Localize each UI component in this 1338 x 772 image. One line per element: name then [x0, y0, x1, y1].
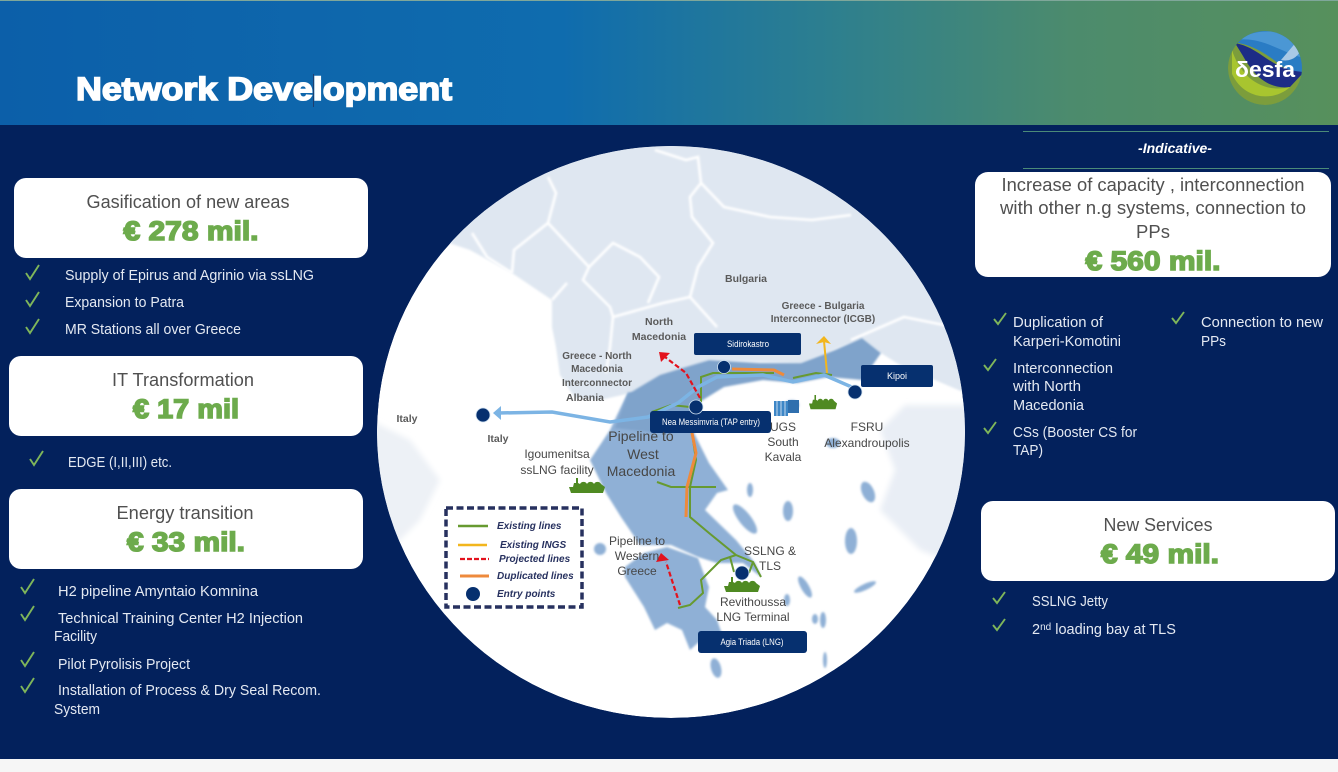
Peloponnese: [625, 547, 723, 650]
duplicated lines: [732, 369, 784, 375]
list: capacity items: Interconnection: [1013, 361, 1113, 377]
map legend: Entry points: [497, 589, 556, 600]
label: Nea Messimvria: Nea Messimvria (TAP entry): [662, 417, 760, 427]
list: gasification items: Expansion to Patra: [65, 295, 185, 311]
map labels: countries and interconnectors: North: [645, 316, 673, 328]
land: Balkans: [440, 140, 970, 400]
label: Sidirokastro: [694, 333, 801, 355]
panel: IT transformation: € 17 mil: [133, 394, 239, 424]
label: Kipoi: [861, 365, 933, 387]
TAP line to Italy: [498, 375, 854, 422]
map labels: countries and interconnectors: Greece - North: [562, 351, 632, 362]
panel: increase of capacity: PPs: [1136, 221, 1170, 242]
map labels: countries and interconnectors: Bulgaria: [725, 273, 767, 285]
map labels: countries and interconnectors: Macedonia: [571, 364, 623, 375]
panel: gasification of new areas: € 278 mil.: [124, 216, 258, 246]
map legend: Existing INGS: [500, 540, 566, 551]
list: capacity items: PPs: [1201, 334, 1226, 350]
panel: new services: € 49 mil.: [1101, 539, 1219, 569]
list: energy items: Pilot Pyrolisis Project: [58, 657, 190, 673]
list: capacity items: TAP): [1013, 443, 1043, 459]
map labels: facilities: Macedonia: [607, 463, 675, 479]
panel: gasification of new areas: Gasification of new areas: [86, 191, 290, 212]
indicative note: [1023, 132, 1329, 168]
map labels: facilities: UGS: [770, 420, 796, 434]
map legend: [446, 508, 582, 607]
list: energy items: Installation of Process & Dry Seal Recom.: [58, 683, 321, 699]
map labels: countries and interconnectors: Greece - Bulgaria: [782, 301, 865, 312]
list: capacity items: Duplication of: [1013, 315, 1104, 331]
icon: UGS tanks: [774, 400, 799, 416]
list: new services items: loading bay at TLS: [1051, 622, 1176, 638]
list: energy items: [21, 579, 321, 718]
map labels: countries and interconnectors: Italy: [487, 433, 509, 445]
map labels: facilities: ssLNG facility: [520, 463, 594, 477]
map legend: Duplicated lines: [497, 571, 574, 582]
land: Turkey: [880, 402, 965, 560]
arrow: ICGB connector: [816, 336, 831, 373]
label: Agia Triada: [698, 631, 807, 653]
borders: [472, 150, 954, 373]
list: gasification items: [26, 265, 314, 338]
map labels: countries and interconnectors: Italy: [396, 413, 418, 425]
logo: desfa: [1228, 31, 1302, 105]
list: capacity items: with North: [1012, 379, 1081, 395]
map circle: [370, 140, 970, 718]
indicative note: -Indicative-: [1138, 140, 1212, 156]
map legend: Existing lines: [497, 521, 562, 532]
existing lines: [652, 373, 832, 608]
list: capacity items: [984, 312, 1324, 459]
header band: [0, 0, 1338, 125]
panel: increase of capacity: with other n.g systems, connection to: [999, 197, 1306, 218]
map labels: countries and interconnectors: Interconnector (ICGB): [771, 314, 875, 325]
footer strip: [0, 759, 1338, 772]
icon: LNG ship Igoumenitsa: [569, 478, 605, 493]
icon: LNG ship FSRU: [809, 395, 837, 409]
map labels: facilities: West: [627, 446, 659, 462]
list: new services items: 2: [1032, 622, 1040, 638]
list: energy items: System: [54, 702, 100, 718]
panel: increase of capacity: € 560 mil.: [1086, 246, 1220, 276]
panel: IT transformation: [9, 356, 363, 436]
logo: desfa: δesfa: [1235, 57, 1296, 82]
label: Nea Messimvria: [650, 411, 771, 433]
list: energy items: Technical Training Center H2 Injection: [58, 611, 303, 627]
panel: new services: New Services: [1104, 514, 1212, 535]
panel: energy transition: Energy transition: [116, 502, 254, 523]
list: new services items: SSLNG Jetty: [1032, 594, 1109, 610]
label: Sidirokastro: Sidirokastro: [727, 339, 769, 349]
label: Kipoi: Kipoi: [887, 371, 907, 381]
map labels: countries and interconnectors: Macedonia: [632, 331, 686, 343]
list: IT items: [30, 451, 172, 471]
panel: gasification of new areas: [14, 178, 368, 258]
map labels: facilities: Alexandroupolis: [824, 436, 910, 450]
label: Agia Triada: Agia Triada (LNG): [720, 637, 784, 647]
islands: [594, 400, 878, 679]
panel: energy transition: [9, 489, 363, 569]
arrowhead: TAP: [493, 406, 501, 420]
map labels: countries and interconnectors: Interconnector: [562, 378, 632, 389]
map legend: Projected lines: [499, 554, 571, 565]
map labels: facilities: TLS: [759, 559, 781, 573]
list: capacity items: Macedonia: [1013, 398, 1085, 414]
map labels: facilities: Revithoussa: [720, 595, 786, 609]
list: energy items: H2 pipeline Amyntaio Komnina: [58, 584, 259, 600]
map labels: facilities: [520, 420, 910, 624]
panel: increase of capacity: Increase of capacity , interconnection: [1002, 174, 1304, 195]
list: new services items: nd: [1040, 622, 1051, 633]
map labels: facilities: Western: [615, 549, 659, 563]
map labels: facilities: LNG Terminal: [716, 610, 790, 624]
land: Italy: [377, 420, 439, 544]
title: Network Development: [76, 71, 452, 107]
icon: LNG ship Revithoussa: [724, 577, 760, 592]
arrow: projected line to North Macedonia: [659, 352, 700, 398]
list: gasification items: MR Stations all over Greece: [65, 322, 241, 338]
arrow: projected line to Western Greece: [656, 553, 680, 605]
list: IT items: EDGE (I,II,III) etc.: [68, 455, 172, 471]
map pipelines: [493, 369, 854, 608]
panel: increase of capacity: [975, 172, 1331, 277]
map labels: facilities: FSRU: [851, 420, 883, 434]
map labels: facilities: Pipeline to: [608, 428, 674, 444]
list: capacity items: CSs (Booster CS for: [1013, 425, 1137, 441]
map labels: facilities: Kavala: [765, 450, 802, 464]
map labels: facilities: South: [767, 435, 799, 449]
panel: new services: [981, 501, 1335, 581]
panel: IT transformation: IT Transformation: [112, 369, 254, 390]
panel: energy transition: € 33 mil.: [127, 527, 245, 557]
list: gasification items: Supply of Epirus and Agrinio via ssLNG: [65, 268, 314, 284]
list: energy items: Facility: [54, 629, 98, 645]
entry points: [476, 360, 862, 580]
Greece mainland: [590, 392, 761, 577]
map labels: facilities: Igoumenitsa: [524, 447, 590, 461]
map labels: facilities: SSLNG &: [744, 544, 796, 558]
map labels: facilities: Greece: [617, 564, 657, 578]
northern Greece: [615, 338, 881, 432]
map labels: countries and interconnectors: [396, 273, 875, 445]
list: capacity items: Connection to new: [1201, 315, 1324, 331]
map labels: countries and interconnectors: Albania: [566, 392, 604, 404]
map labels: facilities: Pipeline to: [609, 534, 665, 548]
list: new services items: [993, 592, 1176, 638]
list: capacity items: Karperi-Komotini: [1013, 334, 1121, 350]
